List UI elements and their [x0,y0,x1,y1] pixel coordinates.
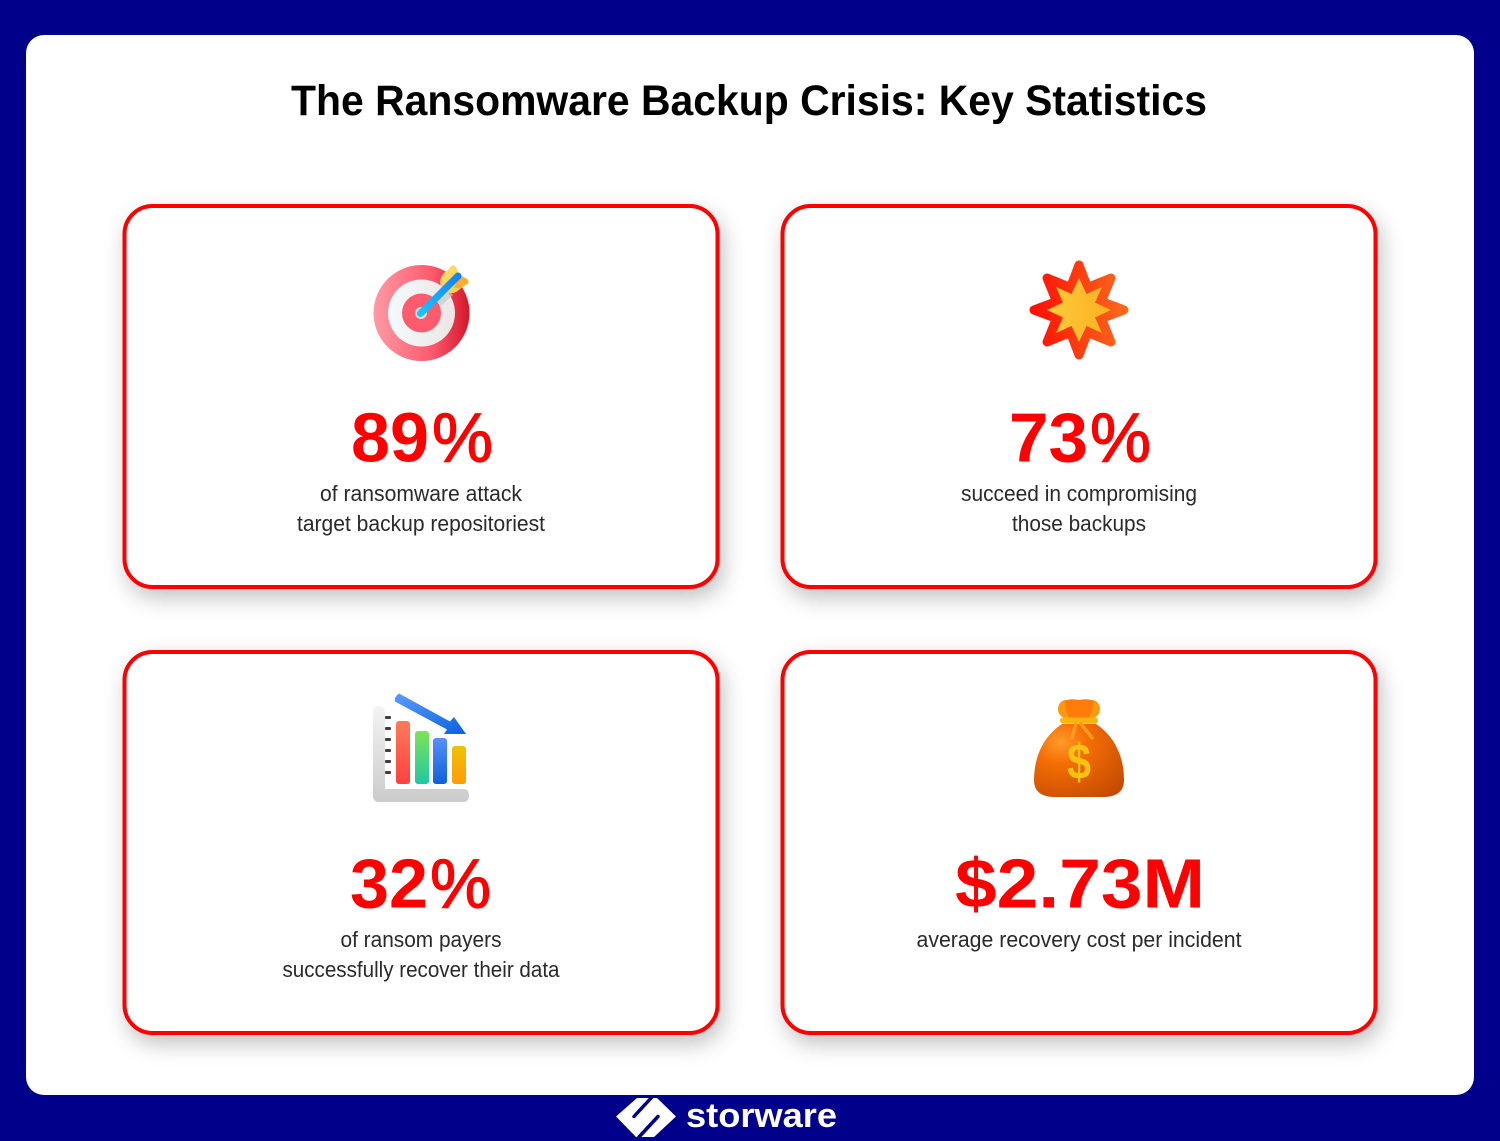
icon: money bag [1034,699,1124,797]
description: succeed in compromising [961,481,1197,506]
panel: 89% stat [124,206,718,587]
icon: money bag: $ [1067,734,1091,790]
stat number: 73 [1009,398,1088,476]
panel: $2.73M stat [782,652,1376,1033]
title: The Ransomware Backup Crisis: Key Statistics [291,77,1207,125]
stat number: 32 [350,844,428,922]
stat number [1009,398,1151,476]
stat number [350,844,491,922]
wordmark: storware [686,1097,837,1135]
panel: 73% stat [782,206,1376,587]
description: those backups [1012,511,1146,536]
description: average recovery cost per incident [916,927,1242,952]
description: of ransom payers [340,927,502,952]
panel: 32% stat [124,652,718,1033]
stat number [351,398,493,476]
stat number: 89 [351,398,429,476]
description: successfully recover their data [282,957,560,982]
icon: logo mark [616,1097,676,1137]
stat number: $2.73M [955,844,1205,922]
description: target backup repositoriest [297,511,545,536]
icon: target with arrow [374,265,470,361]
icon: explosion star [1034,265,1124,355]
description [282,927,560,982]
description: of ransomware attack [320,481,523,506]
stat number: % [1090,398,1151,476]
logo: storware [616,1097,837,1137]
description [961,481,1197,536]
description [297,481,545,536]
stat number: % [432,398,493,476]
stat number: % [430,844,491,922]
icon: declining bar chart [373,694,469,802]
